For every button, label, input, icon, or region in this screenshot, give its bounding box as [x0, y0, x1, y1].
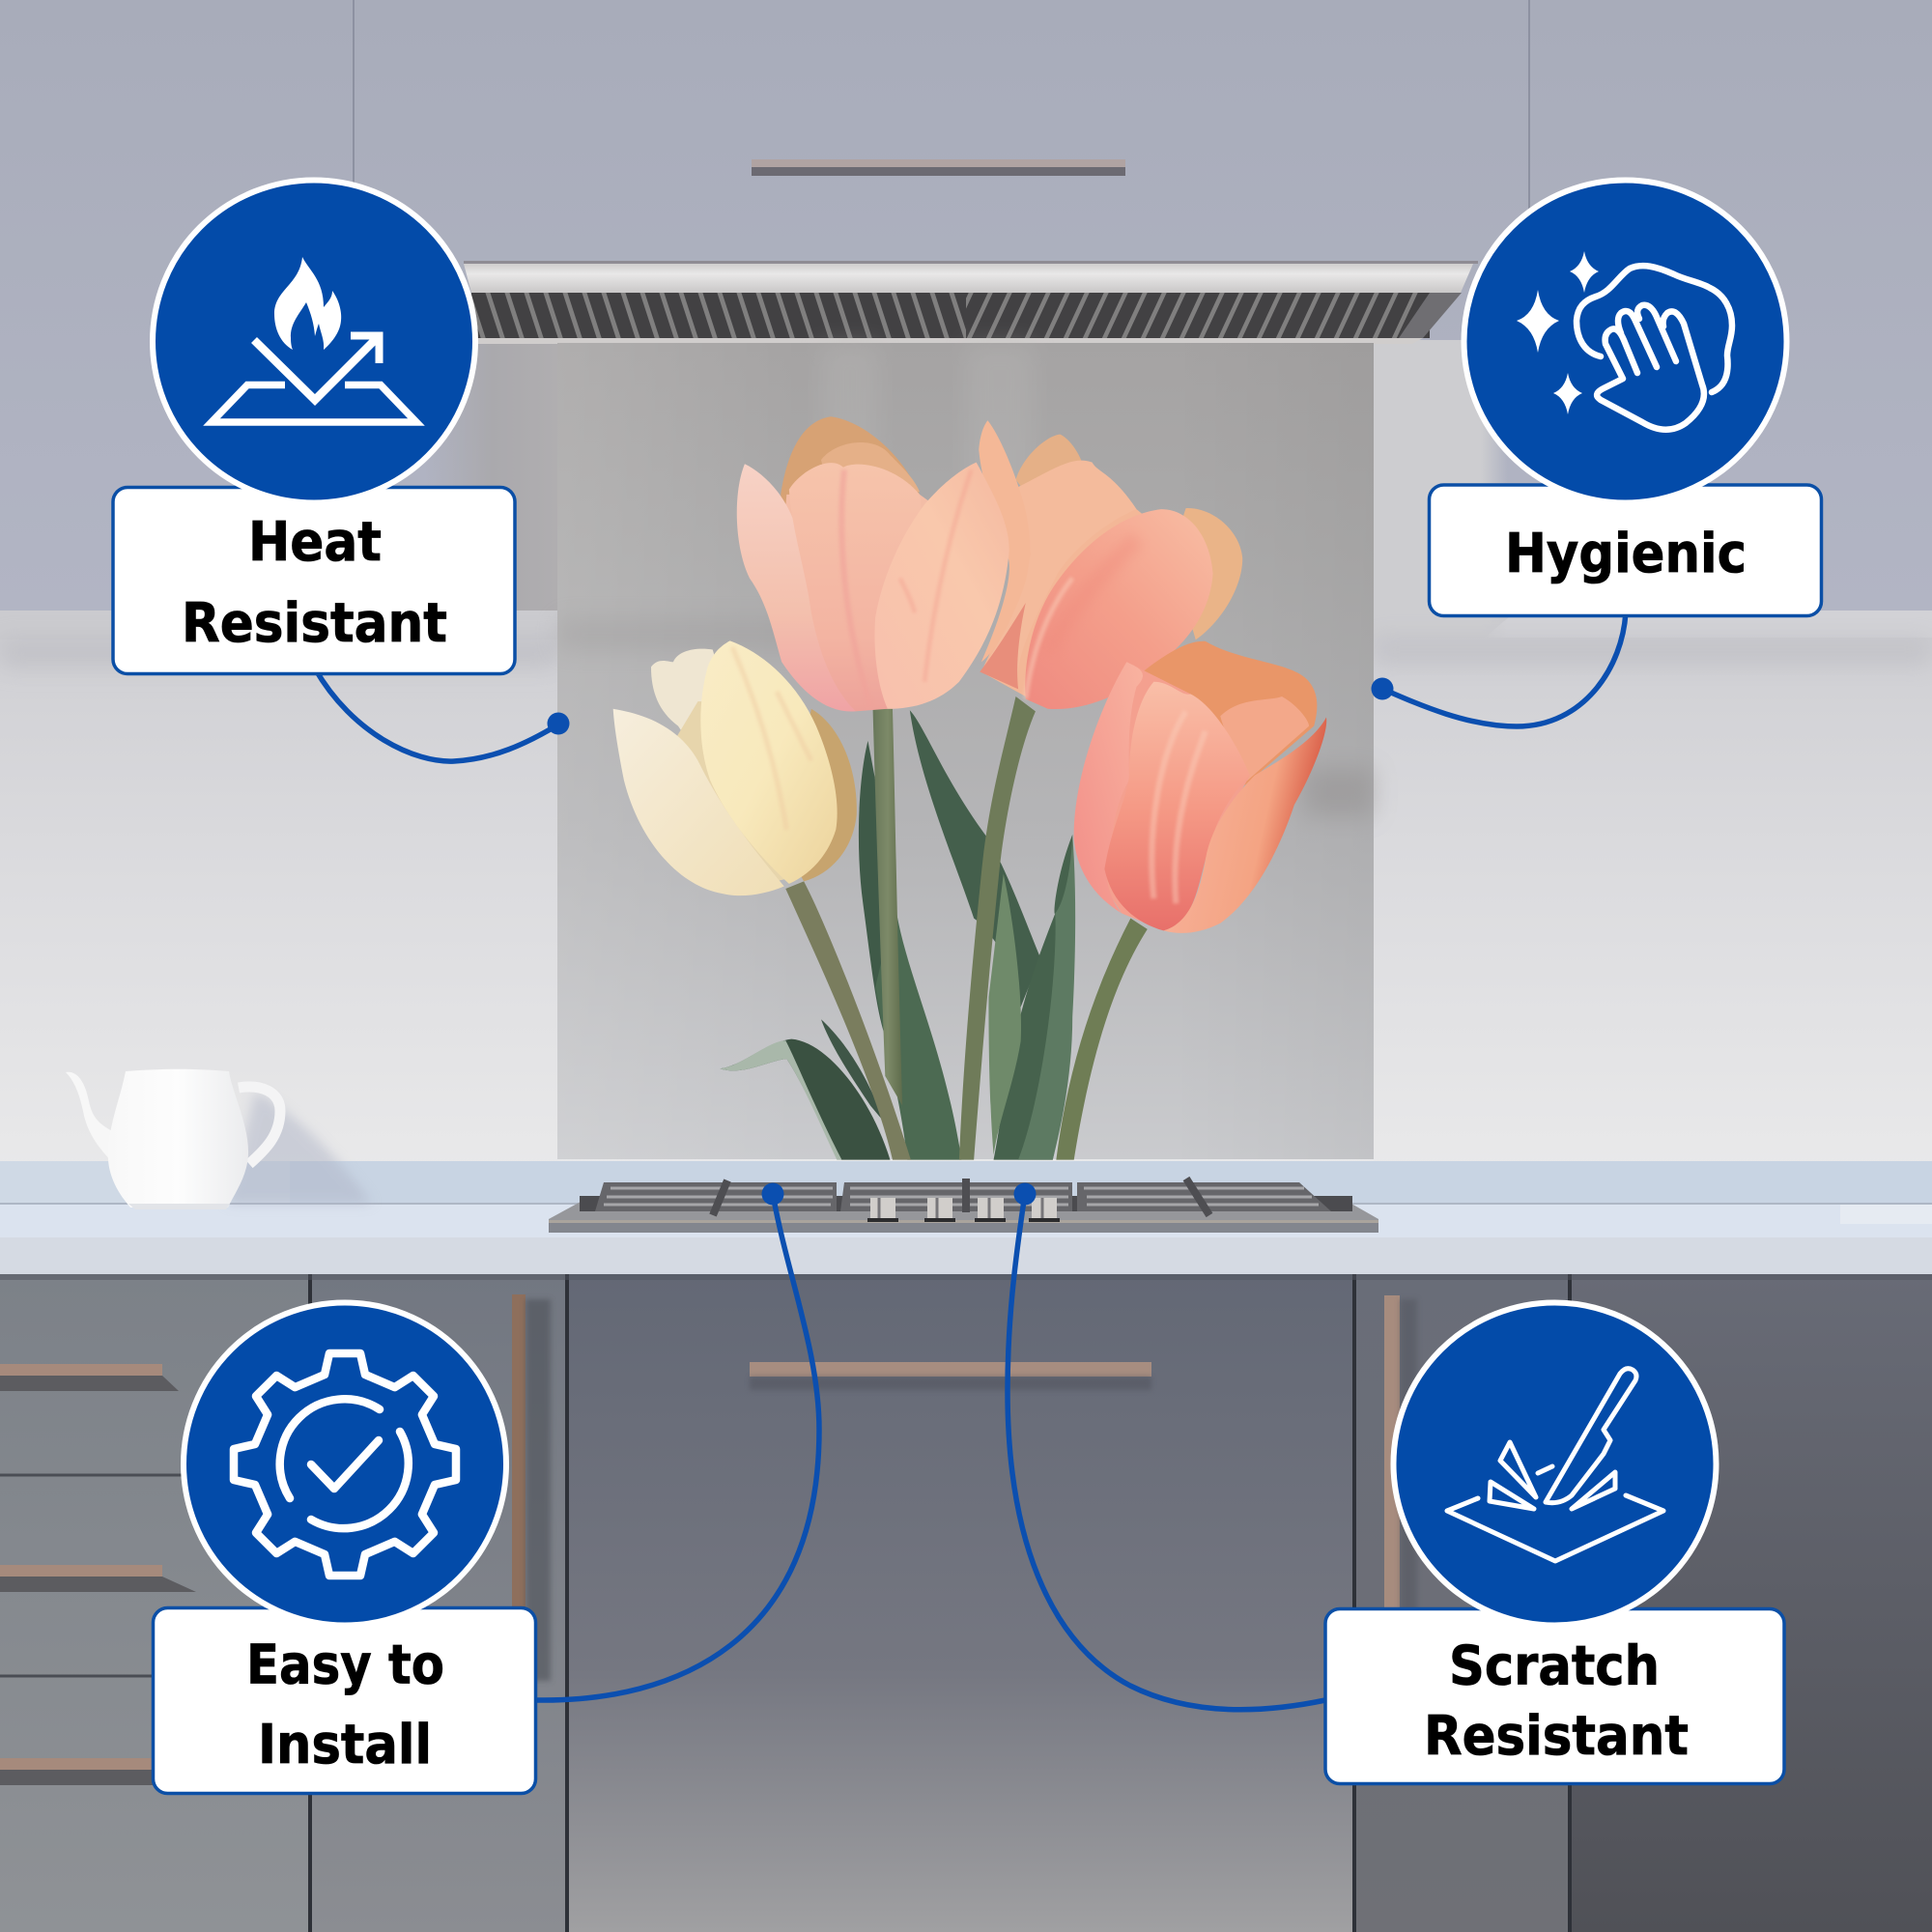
callout: heat resistant [113, 180, 515, 674]
peach tulip left [737, 416, 1030, 712]
icon: knife scratching surface [1447, 1369, 1663, 1561]
label text: Scratch [1449, 1634, 1660, 1698]
icon: gear with check mark [234, 1353, 456, 1576]
callout: easy to install [153, 1302, 535, 1793]
callout: easy to install: Install [258, 1714, 432, 1776]
worktop [0, 1161, 1932, 1274]
wall tiles [0, 541, 1932, 1169]
upper cabinets [0, 0, 1932, 639]
teapot [66, 1069, 372, 1209]
connector: easy to install [537, 1182, 819, 1700]
icon badge [1464, 180, 1787, 502]
cooktop [549, 1179, 1378, 1233]
icon badge [153, 180, 475, 502]
connector: heat resistant [315, 668, 570, 761]
label text: Easy to [246, 1634, 444, 1696]
callout: scratch resistant [1325, 1302, 1784, 1783]
cream tulip [613, 640, 857, 895]
label box [1325, 1609, 1784, 1783]
callout: heat resistant: Resistant [182, 592, 447, 655]
icon badge [184, 1302, 506, 1625]
range hood [464, 261, 1478, 344]
control knobs [867, 1198, 1060, 1220]
lower cabinets [0, 1274, 1932, 1932]
leaves [720, 710, 1075, 1160]
upper cabinet handle [752, 159, 1125, 176]
stems [785, 696, 1148, 1160]
lower cabinet handles [0, 1294, 1417, 1785]
peach tulip right [980, 435, 1242, 709]
coral tulip [1074, 641, 1326, 933]
tulip artwork [613, 416, 1326, 1160]
callout: scratch resistant: Resistant [1424, 1705, 1689, 1768]
label text: Hygienic [1505, 523, 1747, 585]
connector: hygienic [1372, 611, 1626, 726]
soft shadow under cabinets [0, 639, 558, 668]
icon badge [1393, 1302, 1716, 1625]
connector: scratch resistant [1008, 1182, 1325, 1710]
wall beside splashback [425, 340, 1932, 667]
icon: hand wiping with sparkles [1517, 251, 1732, 430]
label text: Heat [248, 511, 382, 574]
splashback panel [557, 343, 1374, 1159]
burner grates [595, 1179, 1331, 1215]
label box [113, 487, 515, 674]
label box [1430, 485, 1822, 616]
callout: hygienic [1430, 180, 1822, 616]
label box [153, 1607, 535, 1793]
icon: flame over surface with arrow [212, 257, 416, 422]
